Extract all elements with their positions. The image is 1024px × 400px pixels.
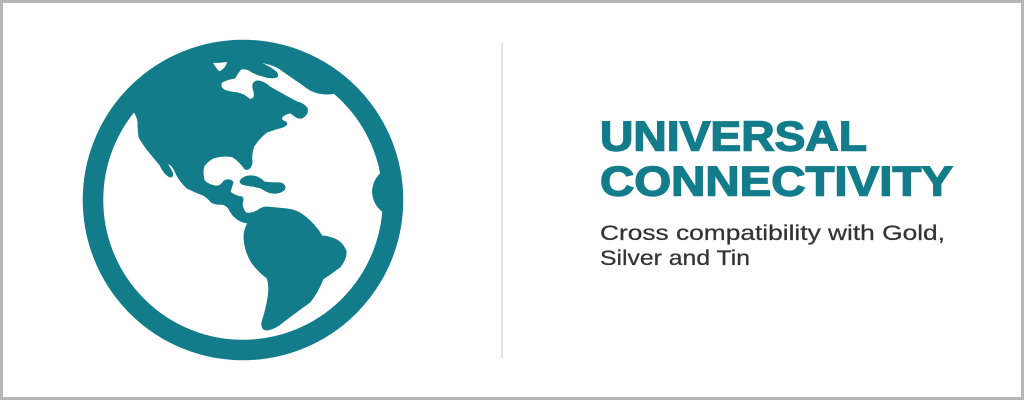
icon: globe bbox=[93, 30, 393, 350]
description line 2: Silver and Tin bbox=[600, 246, 750, 270]
continents: the Americas bbox=[134, 60, 347, 330]
heading bbox=[600, 112, 953, 204]
description line 1: Cross compatibility with Gold, bbox=[600, 221, 945, 245]
continent: Caribbean island bbox=[240, 176, 285, 193]
globe ocean disk bbox=[93, 50, 393, 350]
Arctic white notch bbox=[213, 62, 227, 71]
description text bbox=[600, 221, 945, 270]
globe ring bbox=[93, 50, 393, 350]
divider bbox=[501, 43, 503, 358]
heading line 2: CONNECTIVITY bbox=[600, 158, 953, 204]
heading line 1: UNIVERSAL bbox=[600, 112, 867, 160]
continent: Africa edge bbox=[372, 170, 392, 213]
